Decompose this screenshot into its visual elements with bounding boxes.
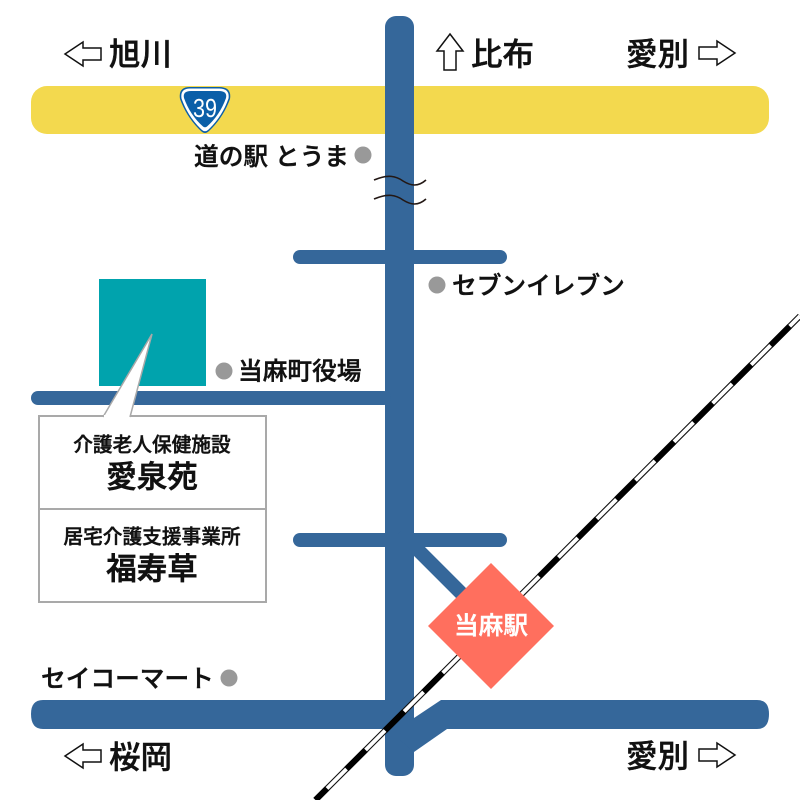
direction: Sakuraoka: 桜岡 bbox=[109, 739, 172, 775]
wavy break marks bbox=[374, 176, 426, 204]
direction: Sakuraoka bbox=[65, 739, 172, 775]
road: bottom left bbox=[31, 700, 400, 729]
pointer joint cover bbox=[104, 415, 129, 418]
shield white ring bbox=[181, 88, 229, 131]
station marker bbox=[428, 563, 554, 689]
direction: Pippu bbox=[437, 34, 534, 72]
road: main vertical bbox=[385, 16, 414, 776]
direction: Aibetsu top bbox=[626, 36, 735, 72]
label: seicomart: セイコーマート bbox=[41, 666, 214, 693]
facility block bbox=[99, 279, 206, 386]
direction: Asahikawa bbox=[65, 36, 172, 72]
road: station approach bbox=[400, 532, 480, 612]
railway line bbox=[316, 316, 800, 800]
road: national route 39 bbox=[31, 86, 769, 134]
station diamond bbox=[428, 563, 554, 689]
road: lower side street bbox=[293, 533, 507, 547]
label: michi-no-eki: 道の駅 とうま bbox=[194, 143, 349, 171]
facility 2 name: 福寿草 bbox=[106, 552, 198, 586]
road: upper side street bbox=[293, 250, 507, 264]
callout box: facilities bbox=[39, 334, 266, 602]
label: seven eleven: セブンイレブン bbox=[452, 272, 625, 300]
facility 1 type: 介護老人保健施設 bbox=[73, 434, 231, 456]
route 39 shield bbox=[180, 87, 230, 133]
label: town hall: 当麻町役場 bbox=[238, 358, 361, 386]
shield inner bbox=[184, 91, 226, 127]
direction: Aibetsu bottom bbox=[626, 738, 735, 774]
shield outer bbox=[180, 87, 230, 133]
direction: Asahikawa: 旭川 bbox=[109, 36, 172, 72]
callout pointer bbox=[103, 334, 152, 417]
facility 1 name: 愛泉苑 bbox=[106, 460, 198, 494]
callout divider bbox=[39, 508, 266, 510]
callout panel bbox=[39, 416, 266, 602]
direction: Aibetsu bottom: 愛別 bbox=[626, 738, 689, 774]
road: bottom right with branch bbox=[400, 700, 769, 752]
station name: 当麻駅 bbox=[454, 612, 528, 640]
facility 2 type: 居宅介護支援事業所 bbox=[63, 526, 241, 548]
direction: Aibetsu top: 愛別 bbox=[626, 36, 689, 72]
route number: 39 bbox=[193, 93, 217, 123]
road: town hall street bbox=[31, 391, 391, 405]
direction: Pippu: 比布 bbox=[471, 36, 534, 72]
